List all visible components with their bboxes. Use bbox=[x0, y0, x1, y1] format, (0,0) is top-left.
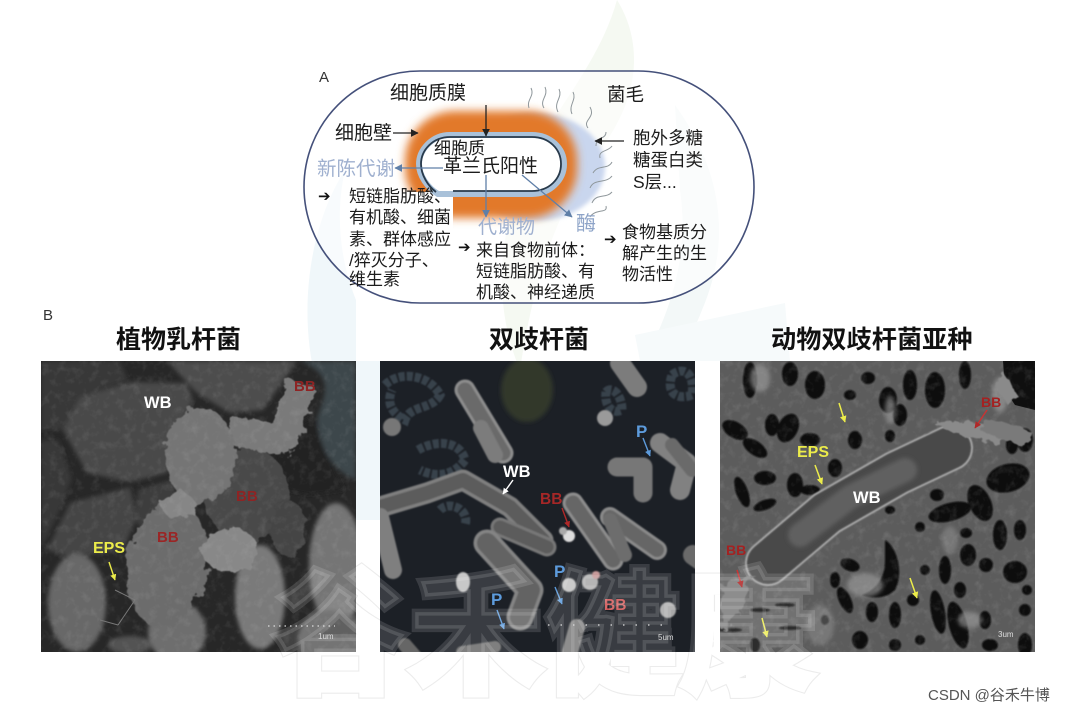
label: WB: WB bbox=[503, 463, 531, 481]
text: metabolism list: 素、群体感应 bbox=[349, 230, 451, 249]
label: BB top: BB bbox=[981, 394, 1001, 410]
label: P center: P bbox=[554, 562, 565, 581]
arrow: EPS lower left bbox=[762, 618, 767, 637]
orange cell wall bbox=[405, 111, 577, 218]
text: metabolism list: /猝灭分子、 bbox=[349, 251, 439, 270]
label: metabolism: 新陈代谢 bbox=[317, 158, 395, 180]
label: cytoplasm: 细胞质 bbox=[434, 139, 485, 158]
outer cell outline bbox=[304, 71, 754, 303]
text: bioactivity: 物活性 bbox=[622, 265, 673, 284]
panel letter A: A bbox=[319, 69, 329, 86]
arrow: P center bbox=[555, 587, 562, 604]
text: exopolysaccharide list: S层... bbox=[633, 172, 677, 192]
label: BB left: BB bbox=[726, 542, 746, 558]
arrow: P lower bbox=[497, 610, 504, 629]
arrow: BB left bbox=[737, 570, 742, 587]
arrow: metabolism bbox=[395, 167, 443, 169]
text: metabolism list: 短链脂肪酸、 bbox=[349, 187, 451, 206]
panel letter B: B bbox=[43, 307, 53, 324]
heading: L. plantarum: 植物乳杆菌 bbox=[116, 325, 241, 354]
cytoplasmic membrane line bbox=[421, 137, 561, 192]
label: WB: WB bbox=[853, 489, 881, 507]
bullet arrow: bioactivity: ➔ bbox=[604, 230, 617, 248]
text: precursors list: 短链脂肪酸、有 bbox=[476, 262, 595, 281]
text: exopolysaccharide list: 糖蛋白类 bbox=[633, 150, 703, 170]
text: metabolism list: 有机酸、细菌 bbox=[349, 208, 451, 227]
smooth wheat cells bbox=[41, 361, 363, 670]
arrow: exopolysaccharide bbox=[595, 140, 624, 142]
source credit: CSDN @谷禾牛博 bbox=[928, 687, 1050, 704]
label: cell wall: 细胞壁 bbox=[335, 122, 392, 144]
arrow: cytoplasmic membrane bbox=[485, 105, 487, 136]
greenish tint bbox=[501, 358, 553, 422]
label: BB lower: BB bbox=[604, 597, 626, 614]
text: metabolism list: 维生素 bbox=[349, 270, 400, 289]
corner shadow bbox=[1003, 361, 1035, 410]
label: P lower: P bbox=[491, 590, 502, 609]
photo background bbox=[720, 361, 1035, 652]
rods bbox=[380, 363, 700, 660]
label: metabolites: 代谢物 bbox=[478, 216, 535, 238]
arrow: BB bbox=[562, 508, 569, 527]
arrow: P right bbox=[643, 438, 650, 456]
matrix holes bbox=[718, 361, 1033, 657]
text: precursors list: 来自食物前体： bbox=[476, 241, 595, 260]
arrow: cell wall bbox=[393, 132, 418, 134]
scale bar: panel 2 bbox=[548, 625, 674, 642]
label: EPS: EPS bbox=[797, 444, 829, 461]
scale bar: panel 1: 1um bbox=[318, 632, 334, 641]
label: BB center: BB bbox=[236, 488, 258, 505]
photo background bbox=[41, 361, 356, 652]
label: BB top: BB bbox=[294, 378, 316, 395]
arrow: EPS top bbox=[839, 403, 845, 422]
arrow: EPS bbox=[109, 562, 115, 580]
heading: Bifidobacterium: 双歧杆菌 bbox=[489, 326, 589, 354]
scale bar: panel 2: 5um bbox=[658, 633, 674, 642]
text: exopolysaccharide list: 胞外多糖 bbox=[633, 128, 703, 148]
arrow: EPS lower right bbox=[910, 578, 917, 598]
text: precursors list: 机酸、神经递质 bbox=[476, 283, 595, 302]
photo panel: Bifidobacterium SEM bbox=[380, 358, 700, 660]
rough BB clumps bbox=[117, 383, 306, 633]
white cutout at lower left bbox=[395, 192, 453, 237]
main WB rod bbox=[768, 448, 950, 563]
label: P right: P bbox=[636, 422, 647, 441]
label: WB: WB bbox=[144, 394, 172, 412]
light matrix patches bbox=[750, 364, 1008, 645]
bullet arrow: precursors list: ➔ bbox=[458, 238, 471, 256]
arrow: WB bbox=[503, 480, 513, 494]
label: EPS: EPS bbox=[93, 540, 125, 557]
heading: B. animalis subspecies: 动物双歧杆菌亚种 bbox=[771, 326, 972, 354]
bullet arrow: metabolism list: ➔ bbox=[318, 187, 331, 205]
rough BB ends bbox=[720, 378, 1030, 630]
blue exopolysaccharide layer bbox=[465, 113, 605, 221]
panel: A bacterial cell diagram bbox=[304, 69, 754, 303]
arrow: EPS label bbox=[815, 465, 822, 484]
label: gram positive: 革兰氏阳性 bbox=[443, 155, 538, 177]
scale label: panel 3: 3um bbox=[998, 630, 1014, 639]
text: bioactivity: 食物基质分 bbox=[622, 223, 707, 242]
arrow: BB top bbox=[975, 410, 987, 428]
round cells and debris bbox=[383, 410, 676, 618]
photo background bbox=[380, 361, 695, 652]
label: pili: 菌毛 bbox=[607, 84, 644, 105]
EPS threads bbox=[100, 590, 135, 625]
pili bbox=[528, 87, 612, 217]
background logo watermark bbox=[307, 0, 790, 520]
noise texture bbox=[720, 361, 1035, 652]
label: enzyme: 酶 bbox=[576, 212, 596, 235]
text: bioactivity: 解产生的生 bbox=[622, 244, 707, 263]
arrow: metabolites bbox=[485, 175, 487, 217]
label: BB: BB bbox=[540, 491, 562, 508]
photo panel: L. plantarum SEM bbox=[41, 361, 363, 670]
inner cell body bbox=[419, 135, 564, 194]
debris meshes bbox=[385, 371, 693, 525]
label: BB left: BB bbox=[157, 529, 179, 546]
noise texture bbox=[41, 361, 356, 652]
label: cytoplasmic membrane: 细胞质膜 bbox=[390, 82, 466, 104]
arrow: enzyme bbox=[522, 175, 572, 217]
scale bar: panel 1 bbox=[268, 626, 335, 641]
photo panel: B. animalis SEM bbox=[718, 361, 1035, 657]
